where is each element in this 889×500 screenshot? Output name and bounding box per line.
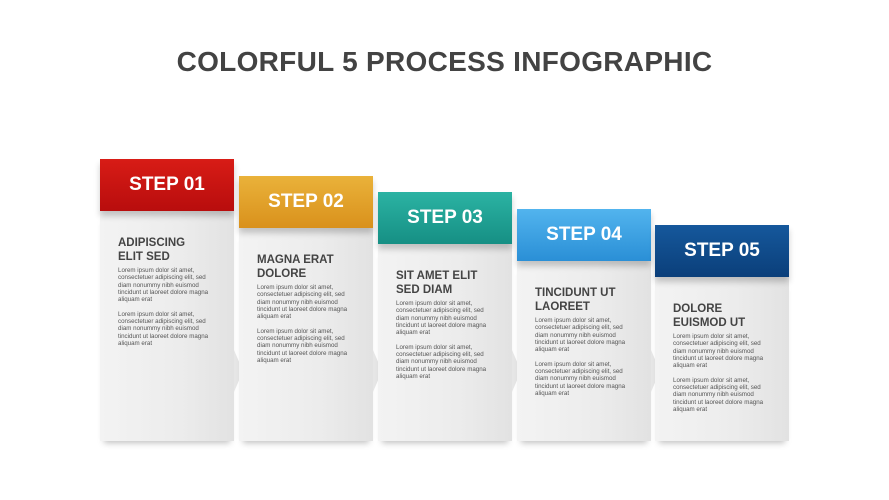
panel: step 04 [514, 209, 655, 446]
heading 5: EUISMOD UT [673, 317, 745, 329]
text 3: Lorem ipsum dolor sit amet, consectetuer adipiscing elit, sed diam nonummy nibh euismod tincidunt ut laoreet dolore magna aliquam erat [396, 344, 486, 380]
header: step 03: STEP 03 [407, 207, 483, 228]
text 2 [257, 284, 348, 364]
card body 4 [517, 261, 651, 441]
text 4 [535, 317, 626, 397]
card body 5 [655, 277, 789, 441]
card body 2 [239, 228, 373, 441]
heading 3: SIT AMET ELIT [396, 270, 477, 282]
heading 1 [118, 237, 185, 263]
panel: step 05 [652, 225, 792, 446]
heading 4: TINCIDUNT UT [535, 287, 616, 299]
header: step 05: STEP 05 [684, 240, 760, 261]
text 1: Lorem ipsum dolor sit amet, consectetuer adipiscing elit, sed diam nonummy nibh euismod tincidunt ut laoreet dolore magna aliquam erat [118, 311, 208, 347]
text 3 [396, 300, 486, 380]
heading 1: ELIT SED [118, 251, 170, 263]
header: step 01: STEP 01 [129, 174, 205, 195]
panel: step 02 [236, 176, 378, 446]
header: step 05 [655, 225, 789, 277]
text 2: Lorem ipsum dolor sit amet, consectetuer adipiscing elit, sed diam nonummy nibh euismod tincidunt ut laoreet dolore magna aliquam erat [257, 284, 347, 320]
heading 3: SED DIAM [396, 284, 452, 296]
text 1 [118, 267, 208, 347]
title: COLORFUL 5 PROCESS INFOGRAPHIC [177, 46, 712, 77]
heading 1: ADIPISCING [118, 237, 185, 249]
text 3: Lorem ipsum dolor sit amet, consectetuer adipiscing elit, sed diam nonummy nibh euismod tincidunt ut laoreet dolore magna aliquam erat [396, 300, 486, 336]
text 5: Lorem ipsum dolor sit amet, consectetuer adipiscing elit, sed diam nonummy nibh euismod tincidunt ut laoreet dolore magna aliquam erat [673, 377, 763, 413]
text 5: Lorem ipsum dolor sit amet, consectetuer adipiscing elit, sed diam nonummy nibh euismod tincidunt ut laoreet dolore magna aliquam erat [673, 333, 763, 369]
text 1: Lorem ipsum dolor sit amet, consectetuer adipiscing elit, sed diam nonummy nibh euismod tincidunt ut laoreet dolore magna aliquam erat [118, 267, 208, 303]
heading 2 [257, 254, 334, 280]
heading 4 [535, 287, 616, 313]
heading 2: DOLORE [257, 268, 306, 280]
heading 5: DOLORE [673, 303, 722, 315]
heading 3 [396, 270, 478, 296]
header: step 02: STEP 02 [268, 191, 344, 212]
header: step 01 [100, 159, 234, 211]
heading 5 [673, 303, 746, 329]
heading 4: LAOREET [535, 301, 590, 313]
card body 3 [378, 244, 512, 441]
panel: step 03 [375, 192, 517, 446]
header: step 04 [517, 209, 651, 261]
text 4: Lorem ipsum dolor sit amet, consectetuer adipiscing elit, sed diam nonummy nibh euismod tincidunt ut laoreet dolore magna aliquam erat [535, 361, 625, 397]
card body 1 [100, 211, 234, 441]
heading 2: MAGNA ERAT [257, 254, 334, 266]
text 5 [673, 333, 764, 413]
header: step 04: STEP 04 [546, 224, 622, 245]
text 4: Lorem ipsum dolor sit amet, consectetuer adipiscing elit, sed diam nonummy nibh euismod tincidunt ut laoreet dolore magna aliquam erat [535, 317, 625, 353]
text 2: Lorem ipsum dolor sit amet, consectetuer adipiscing elit, sed diam nonummy nibh euismod tincidunt ut laoreet dolore magna aliquam erat [257, 328, 347, 364]
panel: step 01 [97, 159, 239, 446]
header: step 03 [378, 192, 512, 244]
header: step 02 [239, 176, 373, 228]
